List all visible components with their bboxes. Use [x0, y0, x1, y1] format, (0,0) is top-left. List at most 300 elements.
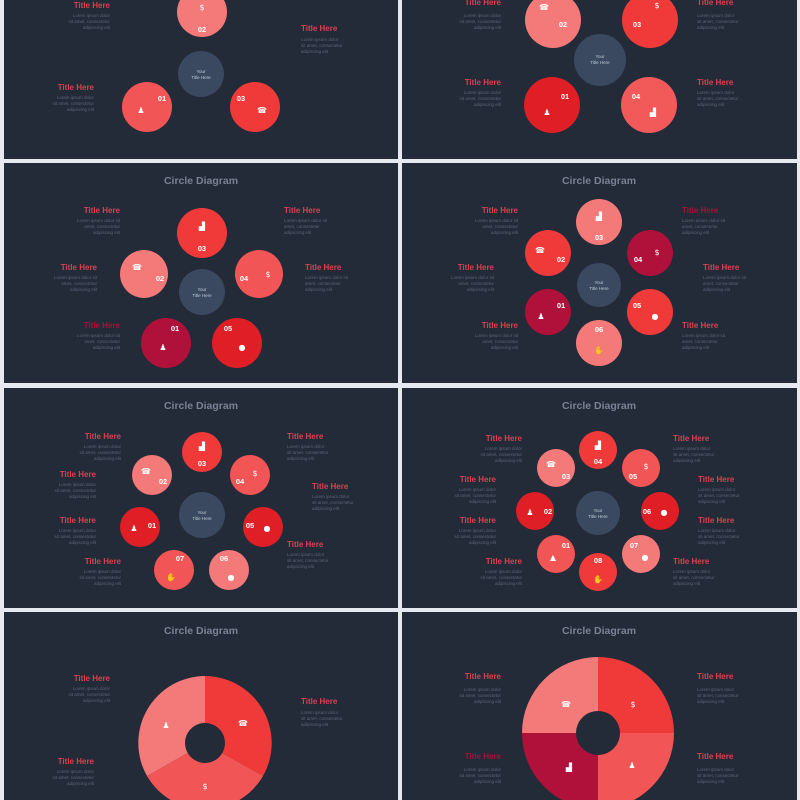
labels: Lorem ipsum dolor	[698, 528, 736, 533]
labels: adipiscing elit	[491, 345, 519, 350]
center hub: Title Here	[192, 293, 212, 298]
labels: adipiscing elit	[94, 581, 122, 586]
labels: sit amet, consectetur	[480, 452, 522, 457]
labels	[451, 206, 747, 350]
center hub	[576, 491, 620, 535]
labels	[54, 206, 349, 350]
circle 04	[627, 230, 673, 276]
labels: adipiscing elit	[697, 25, 725, 30]
heading: Circle Diagram	[562, 175, 636, 187]
labels: adipiscing elit	[495, 458, 523, 463]
center hub: Your	[197, 287, 207, 292]
labels: adipiscing elit	[495, 581, 523, 586]
labels: adipiscing elit	[697, 102, 725, 107]
labels: sit amet, consectetur	[459, 96, 501, 101]
labels: Title Here	[673, 557, 710, 566]
labels: Lorem ipsum dolor	[464, 767, 502, 772]
labels: Lorem ipsum dolor	[301, 710, 339, 715]
labels: Lorem ipsum dolor	[673, 569, 711, 574]
labels: Lorem ipsum dolor	[698, 487, 736, 492]
center hub: Title Here	[589, 286, 609, 291]
center hub: Title Here	[191, 75, 211, 80]
circle 02: 02	[559, 20, 567, 29]
labels: Title Here	[84, 206, 121, 215]
labels: amet, consectetur	[84, 224, 120, 229]
circle 02: 02	[198, 25, 206, 34]
labels: Title Here	[312, 482, 349, 491]
labels: sit amet, consectetur	[698, 534, 740, 539]
circle 03	[622, 0, 678, 48]
circle 03: 03	[198, 459, 206, 468]
labels: Title Here	[301, 697, 338, 706]
labels: Title Here	[284, 206, 321, 215]
donut chart: ▟	[565, 762, 573, 772]
labels: sit amet, consectetur	[673, 575, 715, 580]
center hub: Your	[595, 54, 605, 59]
labels: adipiscing elit	[94, 456, 122, 461]
labels: sit amet, consectetur	[79, 450, 121, 455]
labels: adipiscing elit	[67, 781, 95, 786]
circle 03: ▟	[198, 441, 206, 451]
circle 03	[537, 449, 575, 487]
labels: amet, consectetur	[682, 339, 718, 344]
labels: Title Here	[703, 263, 740, 272]
labels: Lorem ipsum dolor	[697, 13, 735, 18]
labels: sit amet, consectetur	[68, 692, 110, 697]
labels: Lorem ipsum dolor	[312, 494, 350, 499]
labels: Title Here	[697, 672, 734, 681]
circle 02: ☎	[535, 246, 545, 255]
labels: adipiscing elit	[474, 102, 502, 107]
labels: amet, consectetur	[458, 281, 494, 286]
labels: Lorem ipsum dolor	[464, 90, 502, 95]
label left bottom: adipiscing elit	[67, 107, 95, 112]
labels: Title Here	[465, 78, 502, 87]
circle 02	[177, 0, 227, 37]
labels: sit amet, consectetur	[79, 575, 121, 580]
center hub	[574, 34, 626, 86]
labels: adipiscing elit	[698, 540, 726, 545]
circle 03: ☎	[257, 106, 267, 115]
circle 01: ♟	[543, 108, 551, 117]
circle 05	[627, 289, 673, 335]
circle 01: ♟	[159, 343, 167, 352]
labels: Title Here	[465, 752, 502, 761]
labels: Title Here	[60, 516, 97, 525]
heading: Circle Diagram	[562, 400, 636, 412]
center hub	[577, 263, 621, 307]
labels: sit amet, consectetur	[673, 452, 715, 457]
circle 06: ●	[661, 508, 668, 517]
circle 01: 01	[171, 324, 179, 333]
labels: Lorem ipsum dolor sit	[682, 333, 726, 338]
labels: Lorem ipsum dolor	[697, 767, 735, 772]
panel: 6-step circle (row 2 right)	[402, 163, 797, 383]
labels: adipiscing elit	[491, 230, 519, 235]
labels: Lorem ipsum dolor sit	[77, 333, 121, 338]
labels: Title Here	[482, 321, 519, 330]
label right	[301, 24, 343, 54]
labels: sit amet, consectetur	[54, 488, 96, 493]
circle 01: 01	[148, 521, 156, 530]
labels: Lorem ipsum dolor	[459, 528, 497, 533]
circle 04	[235, 250, 283, 298]
circle 06	[209, 550, 249, 590]
circle 01: ▲	[550, 553, 557, 562]
heading: Circle Diagram	[164, 400, 238, 412]
labels	[54, 432, 354, 586]
circle 05: ●	[239, 343, 246, 352]
labels: adipiscing elit	[682, 230, 710, 235]
labels: amet, consectetur	[482, 224, 518, 229]
labels: Title Here	[698, 475, 735, 484]
labels: adipiscing elit	[284, 230, 312, 235]
labels: Lorem ipsum dolor sit	[682, 218, 726, 223]
labels: sit amet, consectetur	[459, 693, 501, 698]
circle 02	[120, 250, 168, 298]
circle 07: 07	[176, 554, 184, 563]
circle 03: 03	[595, 233, 603, 242]
circle 05: $	[643, 462, 649, 471]
labels: sit amet, consectetur	[312, 500, 354, 505]
center hub: Title Here	[192, 516, 212, 521]
center hub: Your	[196, 69, 206, 74]
circle 02	[132, 455, 172, 495]
circle 01	[141, 318, 191, 368]
center hub	[179, 492, 225, 538]
labels: amet, consectetur	[703, 281, 739, 286]
circle 01	[120, 507, 160, 547]
circle 04: $	[654, 248, 660, 257]
circle 03: 03	[237, 94, 245, 103]
labels: Lorem ipsum dolor sit	[284, 218, 328, 223]
label left bottom: sit amet, consectetur	[52, 101, 94, 106]
circle 01: ♟	[137, 106, 145, 115]
circle 07: 07	[630, 541, 638, 550]
labels: sit amet, consectetur	[480, 575, 522, 580]
donut chart: ☎	[238, 719, 248, 728]
circle 03	[576, 199, 622, 245]
labels: Lorem ipsum dolor sit	[703, 275, 747, 280]
labels: Title Here	[673, 434, 710, 443]
circle 01	[537, 535, 575, 573]
labels	[454, 434, 740, 586]
circle 01	[524, 77, 580, 133]
circle 03: 03	[562, 472, 570, 481]
circle 02	[525, 230, 571, 276]
circle 02	[525, 0, 581, 48]
panel: 3-step circle (top left)	[4, 0, 398, 159]
circle 02: 02	[159, 477, 167, 486]
labels: adipiscing elit	[474, 25, 502, 30]
labels: adipiscing elit	[93, 230, 121, 235]
labels: Lorem ipsum dolor	[287, 552, 325, 557]
labels: adipiscing elit	[673, 458, 701, 463]
labels: amet, consectetur	[61, 281, 97, 286]
circle 02: 02	[544, 507, 552, 516]
labels: sit amet, consectetur	[459, 19, 501, 24]
circle 01	[525, 289, 571, 335]
labels: adipiscing elit	[70, 287, 98, 292]
labels: sit amet, consectetur	[287, 450, 329, 455]
labels: adipiscing elit	[287, 456, 315, 461]
labels: sit amet, consectetur	[697, 96, 739, 101]
label left top: Title Here	[74, 1, 111, 10]
labels: Title Here	[682, 321, 719, 330]
label right: adipiscing elit	[301, 49, 329, 54]
circle 05: 05	[633, 301, 641, 310]
heading: Circle Diagram	[164, 625, 238, 637]
circle 04	[579, 431, 617, 469]
circle 03	[182, 432, 222, 472]
circle 03: ▟	[198, 221, 206, 231]
labels: Title Here	[287, 540, 324, 549]
labels: Lorem ipsum dolor sit	[451, 275, 495, 280]
label left bottom: Title Here	[58, 83, 95, 92]
labels: Title Here	[697, 78, 734, 87]
circle 02: 02	[156, 274, 164, 283]
labels: Lorem ipsum dolor	[84, 569, 122, 574]
labels: Lorem ipsum dolor	[673, 446, 711, 451]
center hub: Your	[594, 280, 604, 285]
label left bottom	[52, 83, 95, 112]
labels: adipiscing elit	[301, 722, 329, 727]
panel: 4-part donut (row 4 right)	[402, 612, 797, 800]
labels: amet, consectetur	[84, 339, 120, 344]
labels: adipiscing elit	[83, 698, 111, 703]
circle 08: ✋	[593, 574, 603, 584]
labels: adipiscing elit	[697, 779, 725, 784]
labels: adipiscing elit	[93, 345, 121, 350]
label right: Title Here	[301, 24, 338, 33]
labels: sit amet, consectetur	[54, 534, 96, 539]
labels: Title Here	[84, 321, 121, 330]
circle 02: ☎	[141, 467, 151, 476]
label left top: adipiscing elit	[83, 25, 111, 30]
labels: Lorem ipsum dolor	[485, 446, 523, 451]
labels: sit amet, consectetur	[454, 493, 496, 498]
circle 05: ●	[652, 312, 659, 321]
center hub	[178, 51, 224, 97]
circle 07	[622, 535, 660, 573]
labels: adipiscing elit	[469, 540, 497, 545]
circle 05: 05	[224, 324, 232, 333]
circle 04: $	[252, 469, 258, 478]
circle 06: 06	[643, 507, 651, 516]
labels: adipiscing elit	[69, 540, 97, 545]
labels: adipiscing elit	[305, 287, 333, 292]
labels: sit amet, consectetur	[454, 534, 496, 539]
center hub: Title Here	[590, 60, 610, 65]
circle 07	[154, 550, 194, 590]
circle 06: ✋	[594, 345, 604, 355]
circle 02: $	[199, 3, 205, 12]
circle 03: ▟	[595, 211, 603, 221]
donut chart: ♟	[628, 761, 636, 770]
labels: sit amet, consectetur	[697, 693, 739, 698]
circle 04: $	[265, 270, 271, 279]
labels: Lorem ipsum dolor	[287, 444, 325, 449]
circle 07: ●	[642, 553, 649, 562]
circle 01: 01	[562, 541, 570, 550]
labels: amet, consectetur	[482, 339, 518, 344]
circle 04: 04	[594, 457, 603, 466]
label right: Lorem ipsum dolor	[301, 37, 339, 42]
labels: Title Here	[486, 434, 523, 443]
labels: Lorem ipsum dolor	[59, 528, 97, 533]
labels: Lorem ipsum dolor	[464, 687, 502, 692]
labels: Lorem ipsum dolor sit	[77, 218, 121, 223]
labels	[52, 674, 343, 786]
label left top: sit amet, consectetur	[68, 19, 110, 24]
labels: sit amet, consectetur	[697, 773, 739, 778]
panel: 4-step circle (top right)	[402, 0, 797, 159]
donut chart: $	[202, 782, 208, 791]
donut chart: ♟	[162, 721, 170, 730]
labels: adipiscing elit	[469, 499, 497, 504]
circle 05	[212, 318, 262, 368]
labels: Lorem ipsum dolor	[459, 487, 497, 492]
labels: amet, consectetur	[284, 224, 320, 229]
circle 03	[230, 82, 280, 132]
labels: Title Here	[465, 672, 502, 681]
circle 01: ♟	[130, 524, 138, 533]
circle 02	[516, 492, 554, 530]
center hub: Your	[197, 510, 207, 515]
circle 02: ☎	[539, 3, 549, 12]
donut chart	[522, 657, 674, 800]
labels: Lorem ipsum dolor sit	[475, 218, 519, 223]
label right: sit amet, consectetur	[301, 43, 343, 48]
circle 03: 03	[198, 244, 206, 253]
labels: Title Here	[486, 557, 523, 566]
circle 06	[576, 320, 622, 366]
labels: adipiscing elit	[69, 494, 97, 499]
panel: 7-step circle (row 3 left)	[4, 388, 398, 608]
circle 03	[177, 208, 227, 258]
circle 04: 04	[236, 477, 245, 486]
labels: Lorem ipsum dolor	[697, 90, 735, 95]
circle 06: ●	[228, 573, 235, 582]
labels: Title Here	[482, 206, 519, 215]
labels: Title Here	[460, 516, 497, 525]
circle 01: 01	[158, 94, 166, 103]
labels: sit amet, consectetur	[301, 716, 343, 721]
labels: sit amet, consectetur	[287, 558, 329, 563]
labels: adipiscing elit	[474, 779, 502, 784]
circle 01: 01	[561, 92, 569, 101]
circle 07: ✋	[166, 572, 176, 582]
circle 04: ▟	[594, 440, 602, 450]
labels: adipiscing elit	[287, 564, 315, 569]
donut chart	[138, 676, 272, 800]
labels: sit amet, consectetur	[697, 19, 739, 24]
labels: adipiscing elit	[698, 499, 726, 504]
labels: sit amet, consectetur	[459, 773, 501, 778]
labels: Lorem ipsum dolor	[697, 687, 735, 692]
labels: sit amet, consectetur	[698, 493, 740, 498]
circle 08	[579, 553, 617, 591]
circle 06: 06	[595, 325, 603, 334]
circle 08: 08	[594, 556, 602, 565]
circle 05	[243, 507, 283, 547]
circle 05: 05	[629, 472, 637, 481]
circle 05	[622, 449, 660, 487]
center hub	[179, 269, 225, 315]
labels: adipiscing elit	[467, 287, 495, 292]
circle 06: 06	[220, 554, 228, 563]
labels: Title Here	[697, 752, 734, 761]
labels: Lorem ipsum dolor sit	[305, 275, 349, 280]
circle 04	[621, 77, 677, 133]
circle 01	[122, 82, 172, 132]
labels: Lorem ipsum dolor	[57, 769, 95, 774]
circle 03: ☎	[546, 460, 556, 469]
labels: Title Here	[58, 757, 95, 766]
heading: Circle Diagram	[562, 625, 636, 637]
heading: Circle Diagram	[164, 175, 238, 187]
labels: Lorem ipsum dolor sit	[475, 333, 519, 338]
circle 03: $	[654, 1, 660, 10]
labels: adipiscing elit	[312, 506, 340, 511]
circle 02: 02	[557, 255, 565, 264]
labels: Title Here	[682, 206, 719, 215]
circle 04	[230, 455, 270, 495]
center hub: Your	[593, 508, 603, 513]
labels: Title Here	[60, 470, 97, 479]
labels: Lorem ipsum dolor	[485, 569, 523, 574]
labels: adipiscing elit	[703, 287, 731, 292]
labels: adipiscing elit	[673, 581, 701, 586]
labels: sit amet, consectetur	[52, 775, 94, 780]
labels: Title Here	[305, 263, 342, 272]
panel: 8-step circle (row 3 right)	[402, 388, 797, 608]
circle 01: ♟	[537, 312, 545, 321]
labels	[459, 672, 739, 784]
donut chart: $	[630, 700, 636, 709]
labels	[459, 0, 739, 107]
labels: adipiscing elit	[682, 345, 710, 350]
labels: amet, consectetur	[682, 224, 718, 229]
label left top	[68, 1, 111, 30]
labels: Title Here	[460, 475, 497, 484]
donut chart: ☎	[561, 700, 571, 709]
labels: Lorem ipsum dolor	[464, 13, 502, 18]
circle 04: 04	[240, 274, 249, 283]
panel: 3-part donut (row 4 left)	[4, 612, 398, 800]
circle 04: 04	[634, 255, 643, 264]
labels: Title Here	[698, 516, 735, 525]
circle 01: 01	[557, 301, 565, 310]
labels: adipiscing elit	[474, 699, 502, 704]
circle 04: 04	[632, 92, 641, 101]
circle 05: 05	[246, 521, 254, 530]
circle 04: ▟	[649, 107, 657, 117]
circle 06	[641, 492, 679, 530]
labels: adipiscing elit	[697, 699, 725, 704]
label left top: Lorem ipsum dolor	[73, 13, 111, 18]
circle 05: ●	[264, 524, 271, 533]
labels: Title Here	[85, 557, 122, 566]
circle 02: ☎	[132, 263, 142, 272]
label left bottom: Lorem ipsum dolor	[57, 95, 95, 100]
labels: Title Here	[61, 263, 98, 272]
labels: Title Here	[287, 432, 324, 441]
labels: Title Here	[85, 432, 122, 441]
labels: amet, consectetur	[305, 281, 341, 286]
labels: Lorem ipsum dolor	[73, 686, 111, 691]
labels: Title Here	[458, 263, 495, 272]
